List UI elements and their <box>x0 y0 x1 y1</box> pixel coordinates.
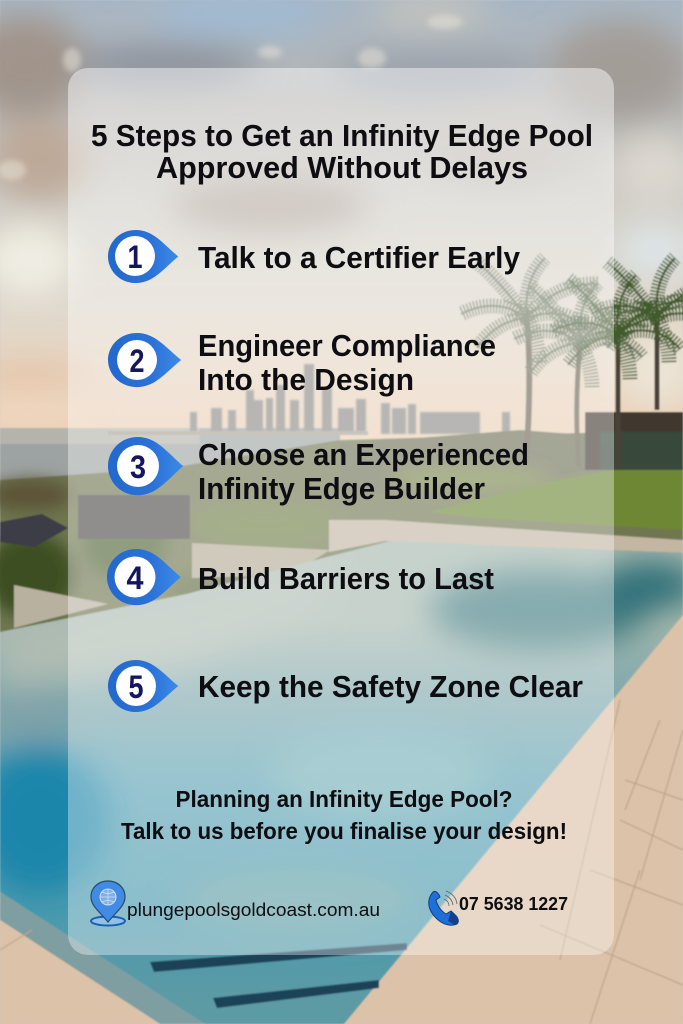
icon: step 5 badge: 5 <box>128 669 144 705</box>
icon: step 2 badge <box>108 333 181 387</box>
deck joints <box>0 700 683 1024</box>
call to action <box>121 786 567 844</box>
phone number: 07 5638 1227 <box>459 894 568 914</box>
step 3 label <box>198 437 529 506</box>
icon: step 4 badge <box>107 549 181 605</box>
sea <box>0 428 340 484</box>
step 3 <box>108 437 529 506</box>
step 5 label: Keep the Safety Zone Clear <box>198 669 583 704</box>
step 2 label: Into the Design <box>198 362 414 397</box>
deck <box>0 600 683 1024</box>
title <box>91 118 593 185</box>
icon: step 1 badge <box>108 230 178 283</box>
step 3 label: Infinity Edge Builder <box>198 471 485 506</box>
icon: step 1 badge: 1 <box>128 239 142 275</box>
website: plungepoolsgoldcoast.com.au <box>127 900 380 920</box>
retaining walls <box>14 585 108 628</box>
step 5 <box>108 660 583 712</box>
icon: step 2 badge: 2 <box>130 343 144 379</box>
skyline <box>190 364 510 434</box>
icon: step 3 badge: 3 <box>130 449 146 485</box>
icon: telephone <box>429 891 458 925</box>
call to action: Planning an Infinity Edge Pool? <box>176 786 512 812</box>
icon: globe location pin <box>91 881 125 926</box>
step 2 label <box>198 328 496 397</box>
icon: step 4 badge: 4 <box>126 560 144 596</box>
step 4 <box>107 549 494 605</box>
step 2 <box>108 328 496 397</box>
title: 5 Steps to Get an Infinity Edge Pool <box>91 118 593 153</box>
step 1 label: Talk to a Certifier Early <box>198 240 521 275</box>
land and trees <box>0 430 683 660</box>
pool floor stripes <box>150 943 407 1008</box>
pool water <box>0 541 683 1024</box>
step 2 label: Engineer Compliance <box>198 328 496 363</box>
title: Approved Without Delays <box>156 150 528 185</box>
translucent panel <box>68 68 614 955</box>
step 1 <box>108 230 521 283</box>
palms <box>526 318 529 462</box>
icon: step 5 badge <box>108 660 178 712</box>
call to action: Talk to us before you finalise your design! <box>121 818 567 844</box>
step 4 label: Build Barriers to Last <box>198 561 494 596</box>
step 3 label: Choose an Experienced <box>198 437 529 472</box>
icon: step 3 badge <box>108 437 183 495</box>
